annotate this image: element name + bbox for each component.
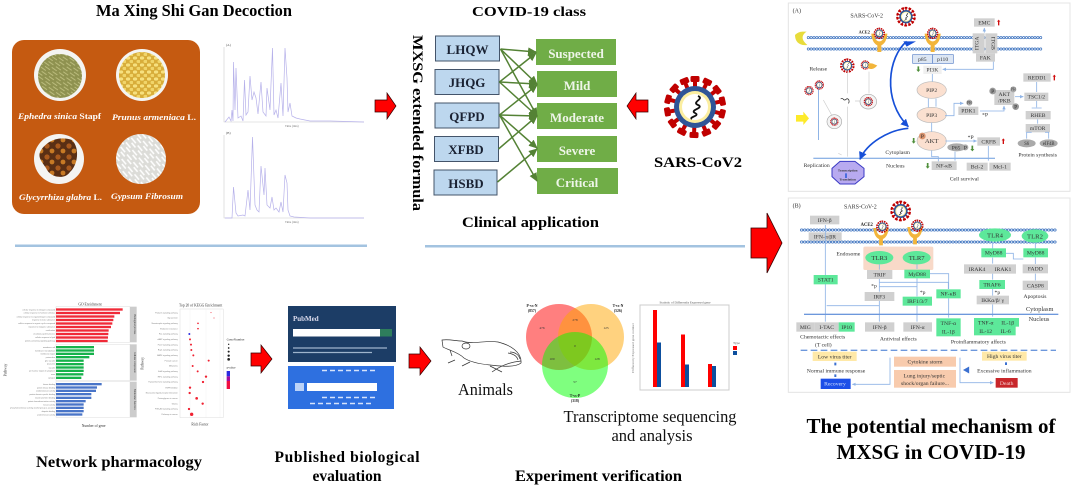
formula boxes: LHQW	[447, 42, 488, 57]
chart: GO enrichment: phosphotransferase activity, alcohol group as acceptor	[10, 407, 55, 410]
panel B: innate immune signalling: Lung injury/septic	[904, 373, 946, 379]
chart: KEGG enrichment: HIF-1 signaling pathway	[158, 375, 178, 378]
chart: Venn diagram: P-vs-N	[527, 304, 538, 308]
chart: chromatogram A	[224, 43, 364, 128]
panel A: PI3K AKT pathway: *P	[968, 135, 974, 141]
chart: KEGG enrichment: Prolactin signaling pathway	[155, 311, 178, 314]
chart: Venn diagram: 128	[594, 357, 600, 361]
panel A: PI3K AKT pathway: EMC	[978, 20, 991, 26]
chart: KEGG enrichment: cAMP signaling pathway	[157, 338, 178, 341]
panel A: PI3K AKT pathway: CRFB	[981, 139, 996, 145]
class boxes: Mild	[564, 78, 591, 93]
panel B: innate immune signalling: TRAF6	[983, 282, 1001, 288]
heading: The potential mechanism: MXSG in COVID-19	[836, 440, 1026, 464]
panel B: innate immune signalling: Recovery	[824, 382, 846, 388]
panel B: innate immune signalling: Low virus titer	[818, 354, 852, 360]
formula boxes	[434, 36, 500, 195]
chart: Venn diagram: (526)	[614, 309, 623, 313]
photo: Glycyrrhiza	[34, 134, 84, 184]
formula boxes: QFPD	[449, 109, 485, 124]
chart: Venn diagram	[526, 304, 624, 403]
chart: Venn diagram: 57	[573, 380, 577, 384]
panel B: innate immune signalling: IRF1/3/7	[907, 299, 928, 305]
panel B: innate immune signalling: I-TAC	[819, 325, 834, 331]
icon: SARS-CoV2 virus	[664, 76, 726, 138]
chart: GO enrichment: Cellular component	[133, 352, 136, 373]
panel A: PI3K AKT pathway: NF-κB	[936, 164, 952, 170]
panel A: PI3K AKT pathway: FAK	[980, 55, 992, 61]
chart: differentially expressed genes: Type	[733, 341, 740, 345]
chart: Venn diagram: (318)	[571, 399, 580, 403]
chart: Venn diagram: T-vs-P	[570, 394, 581, 398]
chart: KEGG enrichment: GeneNumber	[227, 338, 245, 342]
chart: KEGG enrichment: Thyroid hormone signaling pathway	[148, 381, 178, 384]
panel B: innate immune signalling: TLR2	[1027, 233, 1043, 240]
chart: GO enrichment: perinuclear	[46, 357, 55, 359]
panel B: innate immune signalling: TRIF	[874, 272, 886, 278]
herb names	[17, 111, 196, 202]
chart: GO enrichment: Biological process	[133, 314, 136, 334]
panel B: innate immune signalling: *p	[871, 284, 877, 290]
chart: GO enrichment: perinuclear region of cytoplasm	[29, 370, 55, 373]
chart: GO enrichment: membrane region	[40, 354, 55, 356]
label: Transcriptome sequencing and analysis: Transcriptome sequencing	[564, 407, 736, 426]
panel B: innate immune signalling: (T cell)	[815, 341, 832, 348]
label: Transcriptome sequencing and analysis: and analysis	[611, 426, 693, 445]
chart: GO enrichment: ossification	[46, 329, 55, 332]
chart: chromatogram B: Time (min)	[285, 220, 299, 224]
panel B: innate immune signalling: Nucleus	[1029, 316, 1050, 323]
panel B: innate immune signalling: Normal immune response	[807, 368, 866, 374]
chart: differentially expressed genes	[631, 300, 740, 390]
formula boxes: XFBD	[448, 142, 484, 157]
panel B: innate immune signalling: NF-κB	[940, 292, 956, 298]
panel B: innate immune signalling: IL-6	[1001, 329, 1011, 335]
panel B: innate immune signalling: TNF-α	[978, 321, 993, 327]
panel A: PI3K AKT pathway: Translation	[839, 178, 856, 182]
chart: KEGG enrichment: Pathway	[140, 357, 144, 370]
panel A: PI3K AKT pathway: P	[1014, 105, 1017, 111]
panel B: innate immune signalling: IL-1β	[1001, 321, 1014, 327]
panel A: PI3K AKT pathway: ACE2	[859, 29, 870, 34]
screenshot: PubMed: PubMed	[293, 315, 319, 323]
panel A: PI3K AKT pathway: Transcription	[838, 169, 858, 173]
chart: Venn diagram: 278	[572, 318, 578, 322]
herb names: Glycyrrhiza glabra L.	[19, 192, 102, 202]
panel: four herbs	[12, 40, 200, 214]
panel A: PI3K AKT pathway: mTOR	[1030, 126, 1046, 132]
chart: differentially expressed genes: Statistic of Differently Expressed gene	[659, 300, 711, 304]
chart: KEGG enrichment: MAPK signaling pathway	[157, 354, 178, 357]
chart: chromatogram B	[224, 131, 364, 224]
chart: GO enrichment: membrane microdomain	[35, 350, 55, 352]
chart: KEGG enrichment: Rap1 signaling pathway	[158, 349, 178, 352]
heading: Ma Xing Shi Gan Decoction: Ma Xing Shi Gan Decoction	[96, 1, 293, 20]
chart: KEGG enrichment: Top 20 of KEGG Enrichment	[179, 303, 222, 307]
panel B: innate immune signalling: Endosome	[836, 251, 861, 257]
panel B: innate immune signalling: MyD88	[985, 251, 1003, 257]
panel B: innate immune signalling: High virus titer	[987, 354, 1022, 360]
panel A: PI3K AKT pathway: ITGA	[975, 36, 981, 50]
panel B: innate immune signalling: TLR4	[987, 232, 1004, 239]
heading: COVID-19 class: COVID-19 class	[472, 5, 587, 20]
chart: GO enrichment: cellular response to organonitrogen compound	[17, 315, 55, 318]
chart: GO enrichment: response to inorganic substance	[28, 326, 55, 329]
panel A: PI3K AKT pathway: Cell survival	[950, 176, 979, 182]
chart: GO enrichment: cellular response to nitrogen compound	[22, 308, 55, 311]
panel A: PI3K AKT pathway: REDD1	[1028, 75, 1046, 81]
panel A: PI3K AKT pathway: PIP3	[926, 113, 937, 119]
heading: Experiment verification: Experiment verification	[515, 468, 682, 485]
chart: Venn diagram: (857)	[528, 309, 537, 313]
heading: Published biological evaluation	[274, 449, 420, 485]
panel B: innate immune signalling: Excessive inflammation	[977, 367, 1032, 374]
chart: KEGG enrichment: Prostate cancer	[165, 359, 178, 362]
panel A: PI3K AKT pathway: Mcl-1	[993, 165, 1007, 171]
panel B: innate immune signalling: IL-12	[979, 329, 992, 335]
panel A: PI3K AKT pathway: Release	[810, 66, 828, 72]
chart: Venn diagram: T-vs-N	[613, 304, 624, 308]
chart: KEGG enrichment: Proteoglycans in cancer	[158, 397, 178, 400]
herb names: Prunus armeniaca L.	[112, 112, 196, 122]
herb names: Ephedra sinica Stapf	[17, 111, 101, 121]
chart: GO enrichment: ubiquitin binding	[42, 410, 55, 413]
chart: KEGG enrichment: ErbB signaling pathway	[158, 370, 178, 373]
chart: Venn diagram: 100	[549, 357, 555, 361]
panel B: innate immune signalling: IFN-α	[911, 325, 925, 331]
chart: GO enrichment: response to toxic substance	[32, 319, 55, 322]
arrows: formula to class	[498, 49, 537, 182]
formula boxes: JHQG	[449, 75, 485, 90]
class boxes: Critical	[556, 175, 599, 190]
heading: Network pharmacology: Network pharmacology	[36, 454, 202, 471]
panel A: PI3K AKT pathway: PIP2	[926, 88, 937, 94]
chart: GO enrichment: neurotransmitter binding	[35, 397, 55, 400]
chart: GO enrichment: cellular response to organic cyclic compound	[18, 322, 55, 325]
heading: The potential mechanism: The potential mechanism of	[806, 414, 1057, 438]
panel B: innate immune signalling: Apoptosis	[1024, 294, 1046, 300]
panel B: innate immune signalling: IFN-β	[873, 325, 887, 331]
panel B: innate immune signalling: MyD88	[908, 272, 926, 278]
chart: GO enrichment: protein kinase activity	[37, 413, 55, 416]
panel A: PI3K AKT pathway: PI3K	[926, 68, 939, 74]
screenshot: Chinese database	[288, 366, 394, 409]
panel A: PI3K AKT pathway: TSC1/2	[1028, 95, 1045, 101]
chart: GO enrichment: synapse	[48, 378, 55, 380]
panel A: PI3K AKT pathway: (A)	[793, 8, 801, 15]
chart: GO enrichment: vacuole	[49, 367, 55, 369]
chart: GO enrichment: lysosome	[47, 364, 55, 366]
panel A: PI3K AKT pathway: AKT	[925, 138, 939, 145]
panel B: innate immune signalling: IRAK4	[969, 267, 985, 273]
panel A: PI3K AKT pathway: P	[991, 89, 994, 95]
chart: GO enrichment: protein homodimerization activity	[28, 400, 55, 403]
class boxes: Suspected	[548, 46, 605, 61]
panel A: PI3K AKT pathway: Protein synthesis	[1018, 152, 1057, 158]
panel A: PI3K AKT pathway: P	[964, 145, 967, 151]
chart: KEGG enrichment: Glioma	[172, 403, 179, 405]
arrow: PubMed to animals	[409, 347, 431, 375]
panel B: innate immune signalling: Chemotactic effects	[800, 333, 845, 340]
panel B: innate immune signalling: Cytokine storm	[907, 360, 943, 366]
panel B: innate immune signalling: IRF3	[874, 294, 885, 300]
chart: GO enrichment: circulatory system process	[33, 333, 55, 336]
panel B: innate immune signalling: Death	[1000, 381, 1014, 387]
herb names: Gypsum Fibrosum	[111, 191, 183, 201]
panel B: innate immune signalling: CASP8	[1027, 283, 1044, 289]
panel A: PI3K AKT pathway: ITGB	[989, 37, 995, 50]
formula boxes: HSBD	[448, 176, 484, 191]
panel B: innate immune signalling: IP10	[841, 325, 852, 331]
panel B: innate immune signalling: MIG	[800, 325, 811, 331]
heading: Published biological evaluation: Published biological	[274, 449, 420, 466]
chart: Venn diagram: 0	[574, 344, 576, 348]
heading: The potential mechanism	[806, 414, 1057, 464]
chart: chromatogram A: (A)	[226, 43, 232, 47]
panel A: PI3K AKT pathway	[788, 3, 1070, 191]
panel B: innate immune signalling: IKKα/β/ γ	[981, 298, 1005, 304]
panel B: innate immune signalling: TLR7	[909, 255, 925, 262]
panel A: PI3K AKT pathway: *P	[982, 112, 988, 118]
chart: GO enrichment: kinase activity	[43, 403, 55, 406]
chart: GO enrichment: cellular response to lipid	[35, 336, 55, 339]
chart: Venn diagram: 125	[603, 326, 609, 330]
arrow: from virus	[627, 93, 648, 119]
divider right	[425, 245, 745, 248]
panel A: PI3K AKT pathway: Cytoplasm	[885, 150, 911, 156]
panel B: innate immune signalling: shock/organ failure...	[901, 380, 950, 387]
chart: KEGG enrichment: PI3K-Akt signaling pathway	[155, 408, 178, 411]
chart: GO enrichment: GO Enrichment	[78, 302, 102, 306]
panel B: innate immune signalling: ACE2	[861, 223, 873, 228]
panel A: PI3K AKT pathway: AKT	[999, 92, 1011, 98]
chart: KEGG enrichment: FoxO signaling pathway	[158, 343, 178, 346]
panel B: innate immune signalling: Proinflammatory affects	[951, 338, 1006, 345]
chart: GO enrichment: lytic vacuole	[45, 359, 55, 362]
panel B: innate immune signalling: IL-1β	[942, 329, 955, 335]
panel B: innate immune signalling: IFN-α/βR	[814, 234, 836, 240]
panel B: innate immune signalling: Antiviral effects	[880, 335, 917, 342]
chart: GO enrichment: cellular response to hormone stimulus	[24, 312, 55, 315]
panel A: PI3K AKT pathway: eIF4B	[1043, 142, 1054, 147]
label: Transcriptome sequencing and analysis	[564, 407, 736, 445]
panel A: PI3K AKT pathway: Nucleus	[886, 164, 905, 170]
chart: KEGG enrichment: EGFR inhibitor	[165, 386, 178, 389]
chart: Venn diagram: 476	[539, 326, 545, 330]
chart: GO enrichment: axon	[51, 374, 55, 376]
chart: KEGG enrichment: Rich Factor	[191, 422, 209, 426]
chart: KEGG enrichment	[140, 303, 245, 426]
panel A: PI3K AKT pathway: p85	[918, 57, 927, 63]
label: Animals: Animals	[458, 380, 513, 399]
icon: mouse	[442, 340, 521, 372]
chart: chromatogram B: (B)	[226, 131, 232, 135]
chart: KEGG enrichment: Pathways in cancer	[162, 413, 178, 416]
chart: GO enrichment: protein-containing signaling pathway	[25, 340, 55, 343]
chart: KEGG enrichment: Endocrine resistance	[160, 327, 178, 330]
panel A: PI3K AKT pathway: Replication	[804, 163, 830, 169]
chart: GO enrichment: protein kinase binding	[37, 386, 55, 389]
label: SARS-CoV2: SARS-CoV2	[654, 155, 742, 171]
photo: Ephedra	[34, 49, 86, 101]
arrow: to MXSG formula	[375, 93, 396, 119]
chart: chromatogram A: Time (min)	[285, 124, 299, 128]
chart: GO enrichment: Molecular function	[133, 389, 136, 410]
panel B: innate immune signalling: IFN-β	[818, 218, 832, 224]
panel B: innate immune signalling: FADD	[1028, 267, 1043, 273]
panel A: PI3K AKT pathway: PH	[967, 101, 972, 105]
panel A: PI3K AKT pathway: P	[921, 134, 924, 140]
photo: Prunus	[116, 49, 168, 101]
panel A: PI3K AKT pathway: PDK1	[961, 109, 976, 115]
panel B: innate immune signalling: MyD88	[1027, 251, 1045, 257]
chart: GO enrichment: membrane raft	[43, 346, 55, 349]
screenshot: PubMed	[288, 306, 396, 362]
chart: GO enrichment	[4, 302, 137, 428]
arrow: network to PubMed	[251, 345, 272, 373]
panel B: innate immune signalling: *p	[920, 290, 926, 296]
chart: GO enrichment: Number of gene	[82, 424, 106, 428]
class boxes	[536, 39, 618, 194]
panel B: innate immune signalling: Cytoplasm	[1026, 306, 1053, 313]
chart: differentially expressed genes: Differently Expressed gene number	[631, 322, 635, 373]
panel A: PI3K AKT pathway: RHEB	[1030, 113, 1046, 119]
panel B: innate immune signalling: *p	[995, 290, 1000, 296]
divider left	[15, 244, 367, 247]
panel B: innate immune signalling: TLR3	[871, 255, 888, 262]
panel B: innate immune signalling: STAT1	[818, 278, 834, 284]
panel B: innate immune signalling: SARS-CoV-2	[844, 204, 877, 210]
chart: GO enrichment: kinase binding	[43, 384, 55, 386]
panel B: innate immune signalling: (B)	[793, 202, 801, 209]
arrow: large to mechanism	[751, 213, 782, 273]
panel A: PI3K AKT pathway: P65	[952, 145, 961, 151]
chart: KEGG enrichment: Gap junction	[167, 317, 178, 320]
heading: Clinical application: Clinical application	[462, 215, 599, 231]
chart: KEGG enrichment: Neuroactive ligand-receptor interaction	[146, 392, 178, 395]
photo: Gypsum	[116, 134, 166, 184]
panel A: PI3K AKT pathway: p110	[937, 57, 948, 63]
heading: Published biological evaluation: evaluation	[313, 468, 382, 485]
chart: KEGG enrichment: Melanoma	[169, 366, 179, 368]
vertical label: MXSG extended formula: MXSG extended formula	[409, 35, 425, 212]
panel A: PI3K AKT pathway: /PKB	[998, 99, 1011, 105]
chart: GO enrichment: oxidoreductase activity	[36, 390, 55, 393]
panel A: PI3K AKT pathway: S6	[1024, 142, 1030, 147]
panel B: innate immune signalling	[788, 198, 1070, 392]
panel A: PI3K AKT pathway: PH	[1011, 88, 1016, 92]
chart: KEGG enrichment: Ras signaling pathway	[159, 333, 178, 336]
class boxes: Moderate	[550, 110, 604, 125]
panel A: PI3K AKT pathway: SARS-CoV-2	[850, 14, 883, 20]
panel B: innate immune signalling: TNF-α	[941, 321, 956, 327]
chart: GO enrichment: protein domain specific binding	[29, 393, 55, 396]
panel A: PI3K AKT pathway: Bcl-2	[971, 165, 983, 171]
panel B: innate immune signalling: IRAK1	[995, 267, 1011, 273]
chart: KEGG enrichment: Neurotrophin signaling pathway	[152, 322, 178, 325]
chart: GO enrichment: Pathway	[4, 364, 8, 376]
chart: KEGG enrichment: pvalue	[227, 366, 236, 370]
class boxes: Severe	[559, 143, 596, 158]
